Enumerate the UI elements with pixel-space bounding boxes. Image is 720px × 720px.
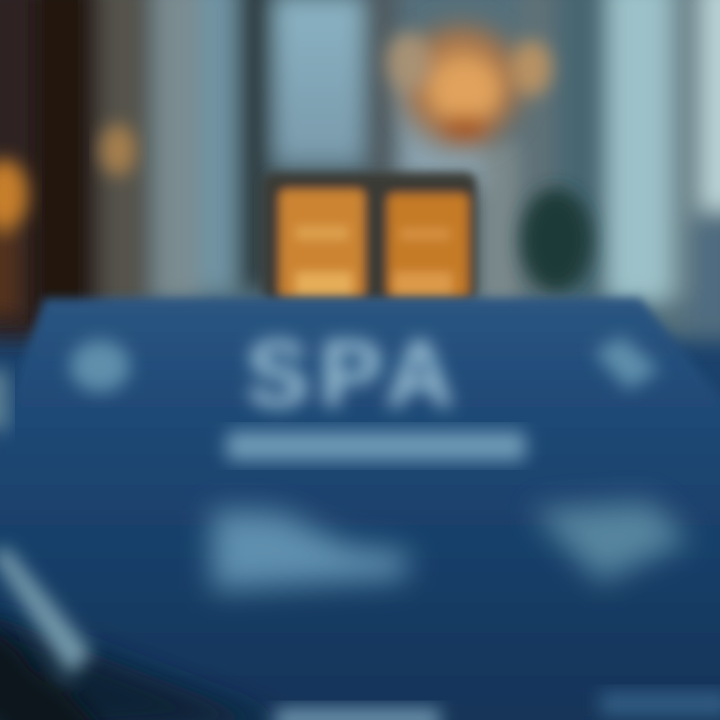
left edge light <box>0 370 8 430</box>
panel shade lower <box>0 610 280 720</box>
blue panel <box>0 298 720 720</box>
left text block <box>212 510 408 590</box>
bottom right strip <box>600 692 720 716</box>
small wall lamp <box>100 124 136 176</box>
top left icon <box>70 340 130 392</box>
plant <box>520 188 592 292</box>
orange glowing boxes <box>262 172 477 302</box>
heading: SPA <box>246 321 464 427</box>
subtitle bar <box>226 431 526 461</box>
chandelier <box>384 7 552 163</box>
amber wall light left <box>0 159 28 315</box>
pen in foreground <box>0 548 110 720</box>
right text block <box>532 502 690 582</box>
top right icon <box>594 336 660 390</box>
background interior <box>0 0 720 340</box>
bottom centre strip <box>275 708 440 720</box>
